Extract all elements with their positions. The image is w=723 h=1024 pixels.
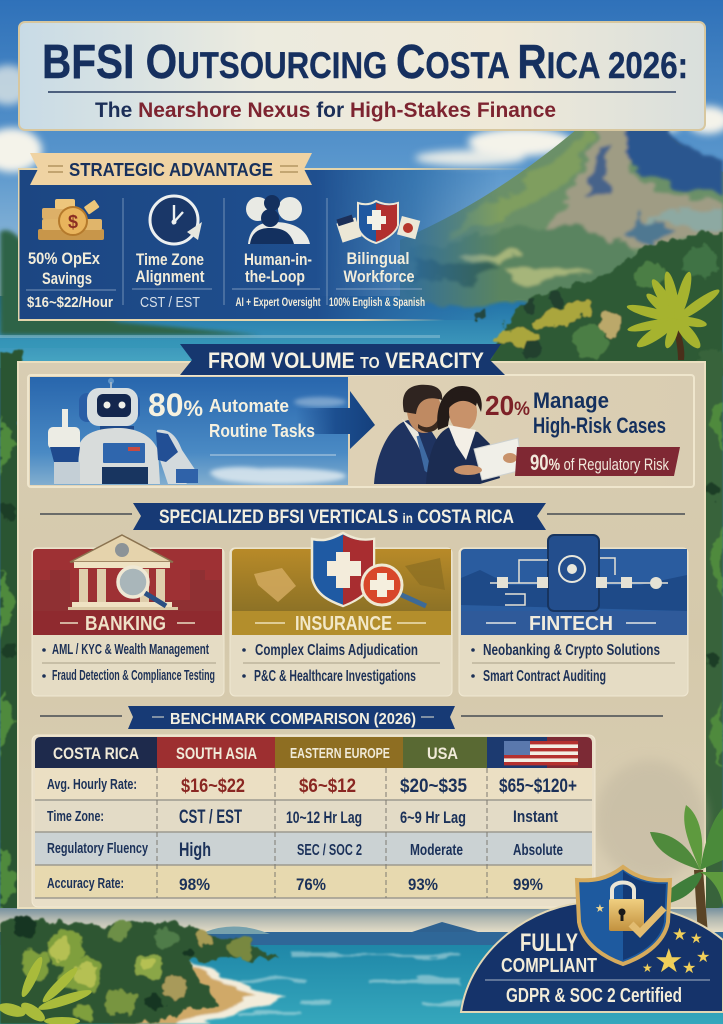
stat: time zone	[132, 250, 212, 311]
stat: 20 percent manage high-risk cases: 20%	[485, 390, 530, 421]
icon: human team	[246, 195, 310, 244]
icon: shield with padlock	[577, 867, 670, 964]
list: insurance services: P&C & Healthcare Investigations	[254, 668, 416, 685]
stat: time zone: Alignment	[136, 267, 205, 286]
row: avg hourly rate: $20~$35	[400, 776, 467, 797]
table: benchmark comparison	[32, 735, 595, 907]
title: BFSI OUTSOURCING COSTA RICA 2026:	[42, 36, 688, 89]
stat: bilingual workforce	[329, 249, 425, 309]
label: banking	[60, 613, 195, 635]
list: banking services: AML / KYC & Wealth Management	[52, 641, 209, 658]
ribbon: benchmark comparison: BENCHMARK COMPARISON (2026)	[170, 711, 416, 728]
badge text	[485, 929, 710, 1007]
label: banking: BANKING	[85, 613, 166, 635]
icon: gold coins: $	[68, 212, 78, 232]
stat: time zone: CST / EST	[140, 295, 200, 311]
table header: EASTERN EUROPE	[290, 746, 390, 762]
stars	[642, 925, 710, 979]
ribbon: specialized verticals	[40, 503, 685, 530]
stat: 80 percent automate: Routine Tasks	[209, 421, 315, 441]
icon: foreground palm	[0, 955, 93, 1024]
stat: human in the loop	[232, 250, 321, 309]
list: banking services	[42, 641, 216, 684]
row: time zone: 10~12 Hr Lag	[286, 808, 362, 827]
stars: ★	[642, 961, 653, 975]
stat: bilingual workforce: Bilingual	[346, 249, 410, 268]
ribbon: benchmark comparison	[40, 706, 663, 729]
row: avg hourly rate: $65~$120+	[499, 776, 577, 797]
stat: time zone: Time Zone	[136, 250, 204, 269]
stat: opex savings: $16~$22/Hour	[27, 295, 113, 311]
title panel	[19, 22, 705, 130]
icon: bank with magnifier	[68, 535, 178, 610]
row: avg hourly rate: $6~$12	[299, 776, 356, 797]
list: insurance services: Complex Claims Adjudication	[255, 642, 418, 659]
row: accuracy rate: 76%	[296, 875, 326, 894]
stat: 20 percent manage high-risk cases: High-Risk Cases	[533, 413, 666, 438]
row: time zone	[47, 807, 558, 828]
row: time zone: 6~9 Hr Lag	[400, 808, 466, 827]
row: accuracy rate: 93%	[408, 875, 438, 894]
row: accuracy rate: 99%	[513, 875, 543, 894]
stat: opex savings	[26, 249, 116, 311]
table header: SOUTH ASIA	[176, 744, 257, 763]
stat: opex savings: Savings	[42, 269, 92, 288]
icon: two professionals reading	[374, 385, 522, 484]
table rows	[35, 768, 592, 898]
icon: gold coins	[38, 199, 104, 240]
callout: regulatory risk: 90% of Regulatory Risk	[530, 450, 669, 475]
icon: clock	[150, 196, 202, 244]
row: time zone: Instant	[513, 807, 558, 826]
icon: palm beside badge	[650, 805, 723, 935]
hero: volume to veracity	[28, 375, 694, 487]
row: avg hourly rate	[47, 776, 577, 797]
list: fintech services: Neobanking & Crypto Solutions	[483, 642, 660, 659]
card: banking	[32, 535, 224, 696]
stat: 20 percent manage high-risk cases	[485, 388, 666, 438]
stat: opex savings: 50% OpEx	[28, 249, 100, 268]
bottom coast	[0, 908, 723, 1024]
icon: phone with workflow	[490, 535, 668, 611]
stat: 80 percent automate: Automate	[209, 396, 289, 416]
label: fintech: FINTECH	[529, 613, 613, 635]
badge text: COMPLIANT	[501, 955, 597, 977]
row: regulatory fluency: Regulatory Fluency	[47, 840, 148, 857]
row: regulatory fluency: Moderate	[410, 842, 463, 859]
table header: USA	[427, 744, 458, 763]
volcano	[400, 105, 723, 305]
stat: 20 percent manage high-risk cases: Manage	[533, 388, 609, 413]
callout: regulatory risk	[515, 447, 680, 476]
row: time zone: CST / EST	[179, 807, 242, 828]
stat: 80 percent automate	[148, 387, 315, 441]
row: regulatory fluency: SEC / SOC 2	[297, 842, 362, 859]
main parchment panel	[18, 344, 705, 908]
label: insurance: INSURANCE	[295, 613, 392, 635]
row: regulatory fluency	[47, 840, 563, 861]
card: fintech	[459, 535, 688, 696]
card: insurance	[230, 533, 452, 696]
list: fintech services	[471, 642, 675, 685]
row: accuracy rate: 98%	[179, 875, 210, 894]
stars: ★	[682, 960, 696, 977]
list: insurance services	[242, 642, 440, 685]
ribbon: from volume to veracity: FROM VOLUME TO VERACITY	[208, 348, 484, 373]
badge: fully compliant	[461, 867, 723, 1012]
subtitle: The Nearshore Nexus for High-Stakes Finance	[95, 99, 556, 122]
stars: ★	[696, 949, 710, 966]
stat: bilingual workforce: 100% English & Spanish	[329, 297, 425, 309]
row: avg hourly rate: $16~$22	[181, 776, 245, 797]
stat: human in the loop: the-Loop	[245, 267, 305, 286]
icon: shield with magnifier	[312, 533, 426, 606]
row: avg hourly rate: Avg. Hourly Rate:	[47, 776, 137, 793]
strategic advantage ribbon	[30, 153, 312, 185]
stars: ★	[690, 930, 703, 946]
row: time zone: Time Zone:	[47, 808, 104, 825]
stat: bilingual workforce: Workforce	[344, 267, 414, 286]
row: accuracy rate: Accuracy Rate:	[47, 875, 124, 892]
stat: 80 percent automate: 80%	[148, 387, 203, 423]
list: fintech services: Smart Contract Auditing	[483, 668, 606, 685]
arrow	[296, 391, 375, 449]
panel: strategic advantage	[18, 153, 530, 321]
icon: palm over jungle	[626, 270, 722, 360]
icon: us flag	[504, 741, 578, 765]
icon: shield with padlock: ★	[595, 903, 605, 915]
stat: human in the loop: AI + Expert Oversight	[236, 297, 321, 309]
stars: ★	[672, 925, 687, 944]
side jungle strips	[0, 350, 723, 930]
badge text: FULLY	[520, 929, 578, 957]
table header	[35, 737, 592, 768]
row: accuracy rate	[47, 875, 543, 894]
list: banking services: Fraud Detection & Compliance Testing	[52, 667, 215, 684]
row: regulatory fluency: Absolute	[513, 842, 563, 859]
ribbon: specialized verticals: SPECIALIZED BFSI VERTICALS in COSTA RICA	[159, 507, 514, 528]
far jungle	[474, 228, 723, 375]
stat: human in the loop: Human-in-	[244, 250, 312, 269]
row: regulatory fluency: High	[179, 840, 211, 861]
strategic advantage ribbon: STRATEGIC ADVANTAGE	[69, 160, 273, 180]
icon: bilingual shield and flags	[336, 201, 420, 243]
table header: COSTA RICA	[53, 744, 139, 763]
icon: robot	[48, 378, 198, 484]
stars: ★	[654, 942, 684, 979]
